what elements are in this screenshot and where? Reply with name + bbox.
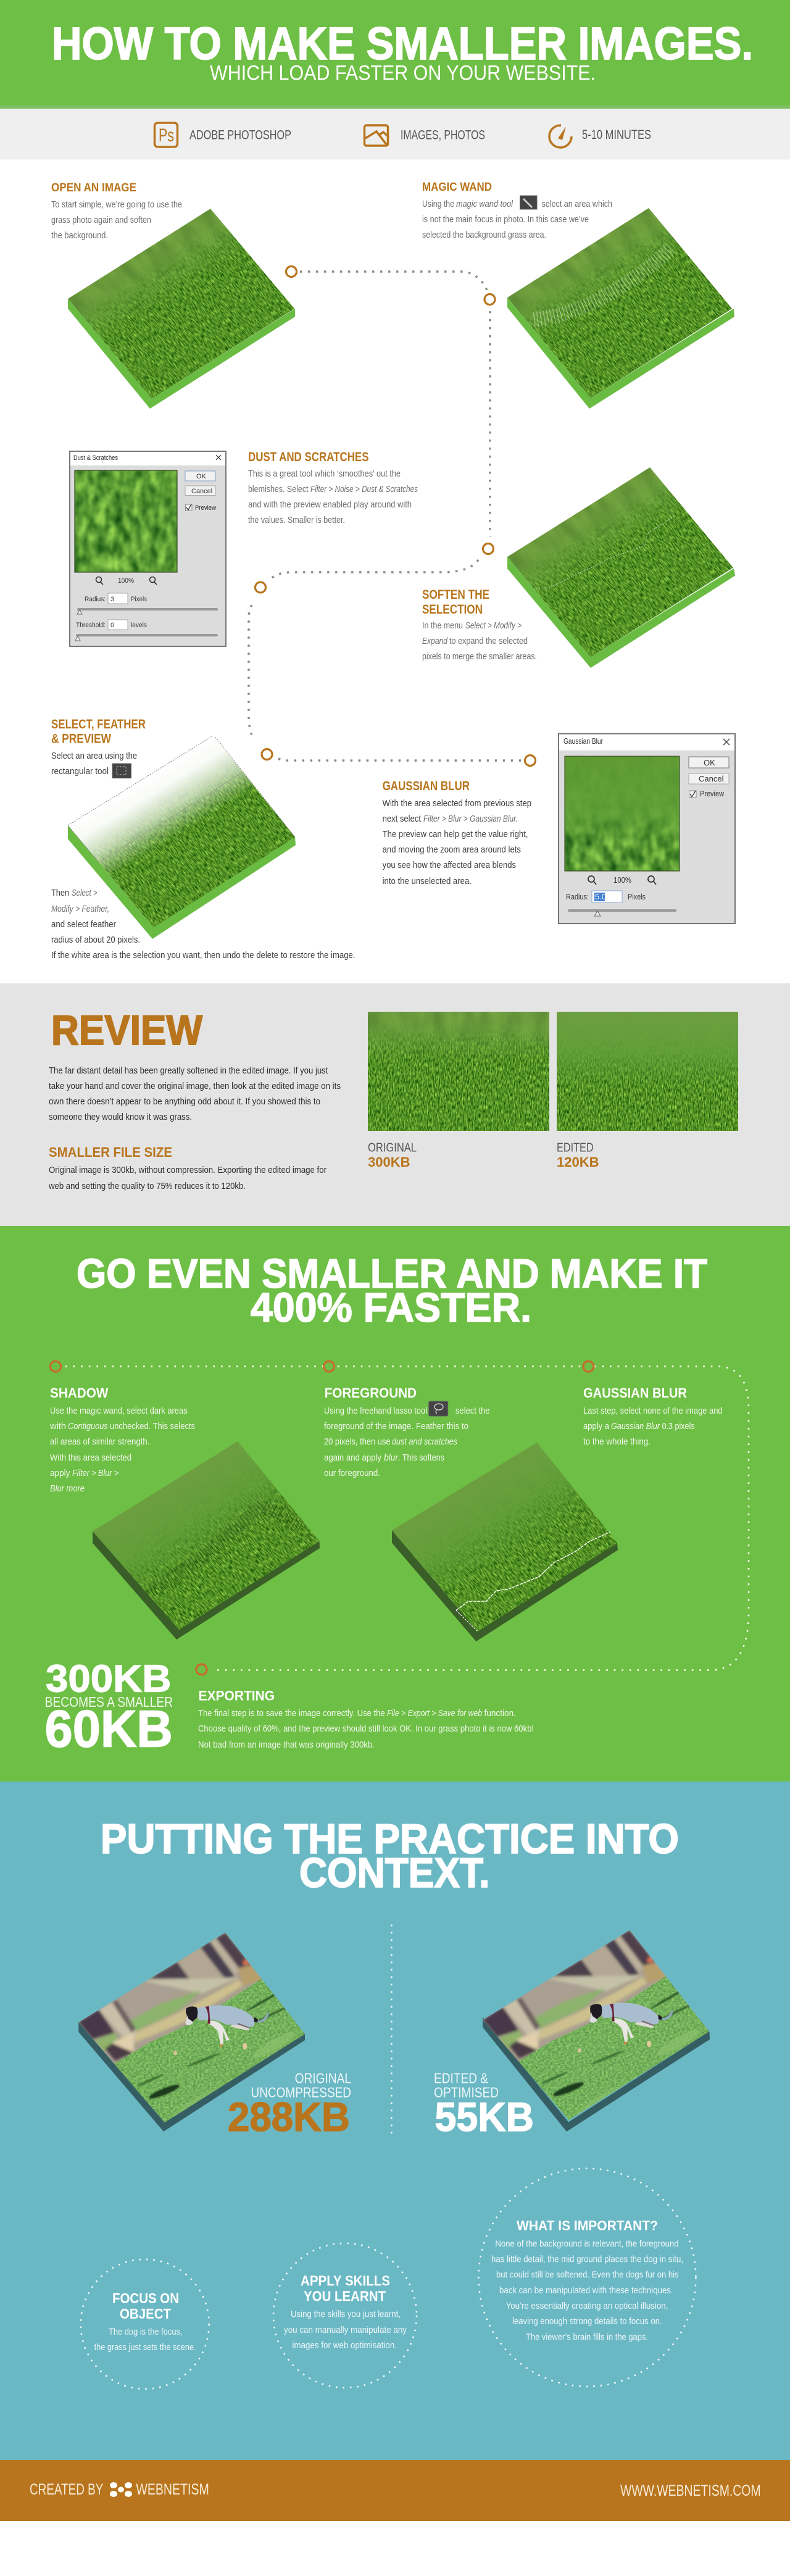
body text: take your hand and cover the original image, then look at the edited image on its	[49, 1081, 341, 1091]
body text: Select > Modify >	[465, 620, 522, 631]
process connector: ring nodes	[256, 267, 536, 765]
step: foreground: foreground of the image. Feather this to	[324, 1421, 468, 1432]
body text: In the menu	[422, 620, 463, 631]
label: 5-10 minutes: 5-10 MINUTES	[582, 128, 651, 142]
heading: GO EVEN SMALLER AND MAKE IT	[77, 1251, 707, 1297]
body text: the background.	[51, 230, 108, 241]
file size text	[48, 1165, 326, 1191]
body text: grass photo again and soften	[51, 215, 151, 225]
circle: apply skills you learnt: you can manually manipulate any	[284, 2325, 407, 2335]
brand name: WEBNETISM	[136, 2481, 209, 2498]
icon: images	[364, 125, 389, 146]
dialog controls: Radius:	[566, 892, 589, 901]
step: shadow: Use the magic wand, select dark areas	[50, 1406, 188, 1416]
step: exporting: File > Export > Save for web	[387, 1708, 482, 1719]
dialog: gaussian blur	[559, 733, 735, 923]
dialog controls: Pixels	[628, 892, 646, 901]
dialog controls: 0	[110, 622, 114, 629]
body text: and moving the zoom area around lets	[383, 844, 521, 855]
circle: what is important: back can be manipulated with these techniques.	[499, 2285, 673, 2296]
step: exporting: function.	[484, 1708, 516, 1719]
subtitle: WHICH LOAD FASTER ON YOUR WEBSITE.	[210, 62, 596, 85]
dialog controls	[566, 875, 676, 916]
body text: you see how the affected area blends	[383, 860, 516, 870]
dialog: dust & scratches: Dust & Scratches	[73, 454, 118, 462]
body text: Using the	[422, 199, 454, 209]
caption: original 300kb: ORIGINAL	[368, 1141, 417, 1154]
step: shadow: unchecked. This selects	[110, 1421, 195, 1432]
step: gaussian blur	[383, 733, 735, 923]
circle: focus on object: FOCUS ON	[112, 2290, 179, 2306]
step: foreground	[324, 1385, 490, 1478]
step: foreground: Using the freehand lasso tool	[324, 1406, 427, 1416]
dialog preview	[75, 470, 177, 572]
credit: CREATED BY	[30, 2481, 104, 2498]
step: foreground: dust and scratches	[392, 1436, 457, 1447]
photo: edited	[557, 1012, 738, 1131]
heading	[101, 1815, 679, 1896]
heading: REVIEW	[51, 1007, 203, 1054]
circle: what is important	[478, 2169, 696, 2386]
circle: what is important: The viewer’s brain fills in the gaps.	[526, 2332, 648, 2342]
circle: focus on object	[81, 2259, 209, 2389]
heading: 400% FASTER.	[251, 1285, 531, 1331]
circle: apply skills you learnt: Using the skills you just learnt,	[291, 2309, 401, 2320]
body text	[422, 620, 537, 662]
section: go even smaller	[0, 1226, 790, 1782]
icon: magic wand tool	[520, 196, 537, 209]
body text: blemishes. Select	[248, 484, 309, 494]
step: foreground: . This softens	[398, 1453, 444, 1463]
photo: original	[368, 1012, 549, 1131]
header banner	[0, 0, 790, 109]
body text: pixels to merge the smaller areas.	[422, 651, 537, 662]
body text: This is a great tool which ‘smoothes’ out the	[248, 469, 401, 479]
icon: timer	[549, 125, 572, 148]
icon: photoshop: Ps	[159, 125, 174, 146]
step: magic wand	[422, 180, 734, 409]
heading: OPEN AN IMAGE	[51, 181, 136, 194]
body text: Select an area using the	[51, 751, 137, 761]
step: shadow: apply	[50, 1468, 70, 1478]
step: select, feather & preview	[51, 717, 356, 961]
caption: original uncompressed 288kb	[228, 2070, 351, 2140]
dialog: dust & scratches	[70, 451, 226, 646]
isometric grass photo	[68, 209, 295, 409]
step: exporting: EXPORTING	[199, 1688, 275, 1703]
step: exporting: The final step is to save the image correctly. Use the	[198, 1708, 385, 1719]
body text: into the unselected area.	[383, 876, 472, 886]
step: exporting	[198, 1688, 534, 1750]
heading: SELECTION	[422, 602, 483, 617]
heading: CONTEXT.	[299, 1849, 490, 1896]
circle: apply skills you learnt: images for web optimisation.	[293, 2340, 397, 2351]
step: gaussian blur: apply a	[583, 1421, 610, 1432]
isometric grass photo with selection	[507, 467, 735, 668]
caption: original uncompressed 288kb: ORIGINAL	[295, 2070, 351, 2086]
icon: webnetism logo	[110, 2482, 132, 2497]
step: exporting: Choose quality of 60%, and the preview should still look OK. In our grass photo it is now 60kb!	[198, 1724, 534, 1734]
isometric dog photo: original	[78, 1933, 305, 2132]
process connector: dotted path	[249, 272, 522, 761]
dialog preview	[565, 756, 680, 871]
step: gaussian blur: Last step, select none of the image and	[583, 1406, 723, 1416]
dialog buttons: Preview	[700, 789, 725, 798]
caption: edited 120kb: EDITED	[557, 1141, 594, 1154]
step: gaussian blur: Gaussian Blur	[611, 1421, 660, 1432]
step: shadow: Filter > Blur >	[72, 1468, 118, 1478]
circle: apply skills you learnt: YOU LEARNT	[304, 2288, 386, 2304]
heading: DUST AND SCRATCHES	[248, 450, 369, 464]
icon: rectangular marquee tool	[112, 764, 131, 778]
dialog: gaussian blur: Gaussian Blur	[563, 736, 604, 746]
step: gaussian blur: to the whole thing.	[583, 1436, 651, 1447]
isometric grass photo with selection	[507, 208, 734, 409]
circle: focus on object: OBJECT	[120, 2306, 171, 2322]
step: shadow: Contiguous	[68, 1421, 108, 1432]
body text	[422, 199, 612, 240]
footer	[0, 2460, 790, 2521]
dotted connector	[65, 1367, 749, 1670]
body text: To start simple, we’re going to use the	[51, 199, 182, 210]
body text: to expand the selected	[449, 636, 528, 646]
circle: what is important: but could still be softened. Even the dogs fur on his	[496, 2269, 679, 2280]
dialog buttons: OK	[196, 473, 207, 480]
step: gaussian blur	[583, 1385, 723, 1447]
heading: MAGIC WAND	[422, 180, 492, 194]
circle: focus on object: the grass just sets the scene.	[94, 2342, 196, 2353]
body text	[51, 199, 182, 241]
step: shadow	[49, 1385, 195, 1494]
subheading: SMALLER FILE SIZE	[49, 1144, 172, 1160]
caption: edited 120kb: 120KB	[557, 1154, 599, 1170]
body text	[49, 1065, 341, 1122]
caption: edited & optimised 55kb: OPTIMISED	[434, 2084, 499, 2100]
heading: SELECT, FEATHER	[51, 717, 146, 732]
circle: what is important: has little detail, the mid ground places the dog in situ,	[491, 2254, 683, 2264]
dialog controls: Radius:	[85, 596, 106, 603]
body text: Filter > Blur > Gaussian Blur.	[423, 814, 518, 824]
step: shadow: with	[49, 1421, 66, 1432]
body text: Filter > Noise > Dust & Scratches	[310, 484, 418, 494]
heading	[51, 717, 146, 746]
dialog controls: 100%	[613, 875, 631, 885]
body text: select an area which	[542, 199, 612, 209]
circle: what is important: You’re essentially creating an optical illusion,	[506, 2301, 668, 2311]
step: shadow: With this area selected	[50, 1453, 131, 1463]
step: soften the selection	[422, 467, 735, 668]
heading: GAUSSIAN BLUR	[383, 779, 470, 793]
isometric grass photo: shadow	[93, 1441, 324, 1640]
step: shadow: SHADOW	[50, 1385, 109, 1401]
body text: and with the preview enabled play around with	[248, 499, 412, 510]
step: foreground: our foreground.	[324, 1468, 380, 1478]
section: review	[0, 983, 790, 1226]
caption: original uncompressed 288kb: 288KB	[228, 2094, 350, 2140]
isometric dog photo: edited	[483, 1930, 710, 2132]
body text: next select	[383, 814, 422, 824]
caption: original 300kb: 300KB	[368, 1154, 410, 1170]
isometric grass photo: foreground	[392, 1443, 623, 1641]
body text	[383, 798, 531, 886]
icon: photoshop	[154, 123, 178, 147]
dialog controls: Threshold:	[76, 622, 106, 629]
body text: radius of about 20 pixels.	[51, 935, 140, 945]
body text: Select >	[72, 888, 98, 898]
body text	[248, 469, 418, 525]
step: foreground: FOREGROUND	[325, 1385, 417, 1401]
stat: 300kb becomes 60kb: 60KB	[45, 1700, 173, 1758]
dialog controls: 5.0	[595, 892, 606, 901]
dialog buttons	[185, 471, 216, 512]
body text: The preview can help get the value right,	[383, 829, 528, 840]
body text: and select feather	[51, 919, 116, 930]
file size text: Original image is 300kb, without compression. Exporting the edited image for	[49, 1165, 326, 1175]
file size text: web and setting the quality to 75% reduces it to 120kb.	[48, 1181, 246, 1191]
step: shadow: all areas of similar strength.	[50, 1436, 149, 1447]
caption: edited & optimised 55kb: EDITED &	[434, 2070, 488, 2086]
body text: Then	[51, 888, 69, 898]
heading	[422, 588, 489, 617]
dialog controls: Pixels	[131, 596, 147, 603]
step: gaussian blur: GAUSSIAN BLUR	[583, 1385, 687, 1401]
body text: Expand	[422, 636, 448, 646]
label: adobe photoshop: ADOBE PHOTOSHOP	[189, 128, 291, 142]
caption: edited & optimised 55kb	[434, 2070, 534, 2140]
ring nodes	[51, 1361, 594, 1675]
circle: what is important: leaving enough strong details to focus on.	[512, 2316, 662, 2327]
heading	[77, 1251, 707, 1331]
body text: selected the background grass area.	[422, 230, 546, 240]
caption: edited 120kb	[557, 1141, 599, 1170]
body text: If the white area is the selection you want, then undo the delete to restore the image.	[51, 950, 356, 961]
step: foreground: 20 pixels, then use	[324, 1436, 391, 1447]
heading: & PREVIEW	[51, 732, 111, 746]
body text: With the area selected from previous step	[383, 798, 531, 809]
body text: is not the main focus in photo. In this case we’ve	[422, 214, 589, 225]
caption: original uncompressed 288kb: UNCOMPRESSED	[251, 2084, 351, 2100]
step: dust and scratches	[70, 450, 418, 646]
body text: own there doesn’t appear to be anything odd about it. If you showed this to	[49, 1096, 320, 1107]
step: shadow: Blur more	[50, 1483, 85, 1494]
stat: 300kb becomes 60kb: 300KB	[46, 1658, 172, 1701]
heading: PUTTING THE PRACTICE INTO	[101, 1815, 679, 1862]
heading: SOFTEN THE	[422, 588, 489, 602]
dialog buttons: Cancel	[191, 488, 212, 495]
dialog controls: 100%	[118, 577, 134, 585]
dialog controls: levels	[131, 622, 147, 629]
step: foreground: again and apply	[324, 1453, 381, 1463]
circle: apply skills you learnt	[273, 2243, 417, 2388]
body text: The far distant detail has been greatly softened in the edited image. If you just	[49, 1065, 328, 1076]
stat: 300kb becomes 60kb	[45, 1658, 173, 1758]
body text: Modify > Feather,	[51, 904, 109, 914]
dialog controls	[75, 577, 218, 641]
dialog buttons: Preview	[195, 504, 216, 512]
dialog buttons: OK	[704, 758, 715, 767]
dialog controls: 3	[110, 596, 114, 603]
label: images, photos: IMAGES, PHOTOS	[401, 128, 485, 142]
circle: focus on object: The dog is the focus,	[109, 2327, 183, 2337]
section: putting the practice into context	[0, 1782, 790, 2460]
divider: dotted line	[391, 1925, 393, 2139]
step: exporting: Not bad from an image that was originally 300kb.	[198, 1740, 375, 1750]
stat: 300kb becomes 60kb: BECOMES A SMALLER	[45, 1694, 173, 1710]
body text: magic wand tool	[456, 199, 514, 209]
circle: what is important: None of the background is relevant, the foreground	[495, 2238, 679, 2249]
dialog buttons	[689, 757, 729, 798]
dialog buttons: Cancel	[699, 774, 724, 783]
body text: rectangular tool	[51, 766, 109, 777]
circle: what is important: WHAT IS IMPORTANT?	[517, 2218, 658, 2233]
body text	[51, 751, 356, 961]
icon: lasso tool	[429, 1401, 448, 1416]
step: foreground: select the	[455, 1406, 490, 1416]
caption: original 300kb	[368, 1141, 417, 1170]
step: open an image	[51, 181, 295, 409]
circle: apply skills you learnt: APPLY SKILLS	[301, 2273, 390, 2289]
isometric grass photo with fade	[68, 736, 299, 939]
step: gaussian blur: 0.3 pixels	[662, 1421, 695, 1432]
body text: the values. Smaller is better.	[248, 515, 345, 525]
caption: edited & optimised 55kb: 55KB	[434, 2094, 534, 2140]
requirements bar	[0, 109, 790, 159]
step: foreground: blur	[384, 1453, 399, 1463]
body text: someone they would know it was grass.	[49, 1112, 192, 1122]
